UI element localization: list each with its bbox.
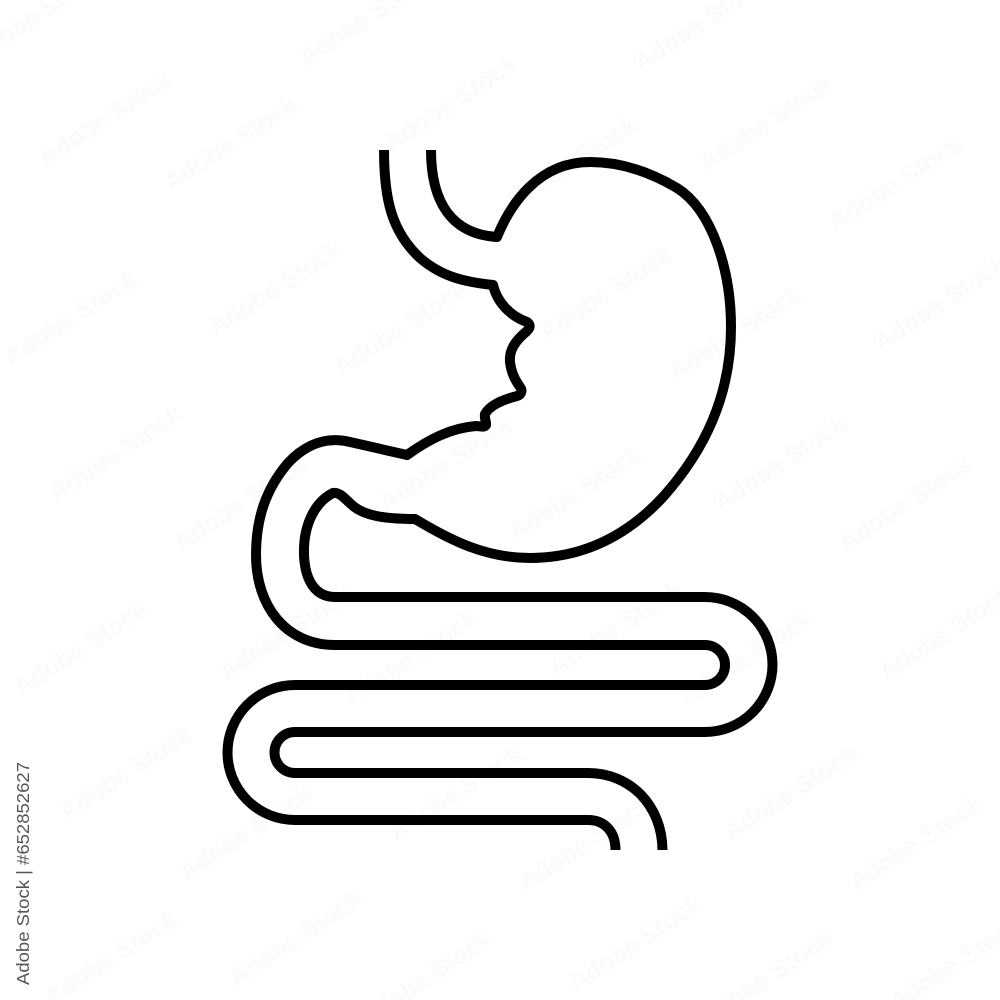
watermark pattern: Adobe Stock: [824, 130, 967, 237]
watermark pattern: Adobe Stock: [374, 410, 517, 517]
watermark pattern: Adobe Stock: [694, 70, 837, 177]
watermark pattern: Adobe Stock: [34, 65, 177, 172]
esophagus inner wall and ulcerated lesser curvature: [228, 150, 725, 850]
watermark pattern: Adobe Stock: [379, 50, 522, 157]
watermark pattern: Adobe Stock: [664, 280, 807, 387]
watermark pattern: Adobe Stock: [54, 720, 197, 827]
watermark pattern: Adobe Stock: [329, 275, 472, 382]
watermark pattern: Adobe Stock: [844, 790, 987, 897]
watermark pattern: Adobe Stock: [224, 885, 367, 992]
watermark pattern: Adobe Stock: [214, 580, 357, 687]
stock id caption: Adobe Stock | #652852627: [13, 762, 33, 985]
watermark pattern: Adobe Stock: [339, 605, 482, 712]
watermark pattern: Adobe Stock: [204, 235, 347, 342]
watermark pattern: Adobe Stock: [534, 240, 677, 347]
watermark pattern: Adobe Stock: [174, 780, 317, 887]
watermark pattern: Adobe Stock: [0, 265, 142, 372]
watermark pattern: Adobe Stock: [499, 110, 642, 217]
watermark pattern: Adobe Stock: [709, 410, 852, 517]
watermark pattern: Adobe Stock: [44, 400, 187, 507]
watermark pattern: Adobe Stock: [169, 450, 312, 557]
watermark pattern: Adobe Stock: [9, 595, 152, 702]
icon: stomach and intestine outline: [228, 150, 772, 850]
watermark pattern: Adobe Stock: [834, 450, 977, 557]
watermark pattern: Adobe Stock: [159, 90, 302, 197]
watermark pattern: Adobe Stock: [504, 440, 647, 547]
watermark pattern: Adobe Stock: [514, 790, 657, 897]
watermark pattern: Adobe Stock: [674, 605, 817, 712]
esophagus and stomach outer curve, continuing to pylorus: [274, 150, 772, 850]
watermark pattern: Adobe Stock: [384, 740, 527, 847]
watermark pattern: Adobe Stock: [564, 890, 707, 997]
watermark pattern: Adobe Stock: [719, 740, 862, 847]
watermark pattern: Adobe Stock: [544, 575, 687, 682]
